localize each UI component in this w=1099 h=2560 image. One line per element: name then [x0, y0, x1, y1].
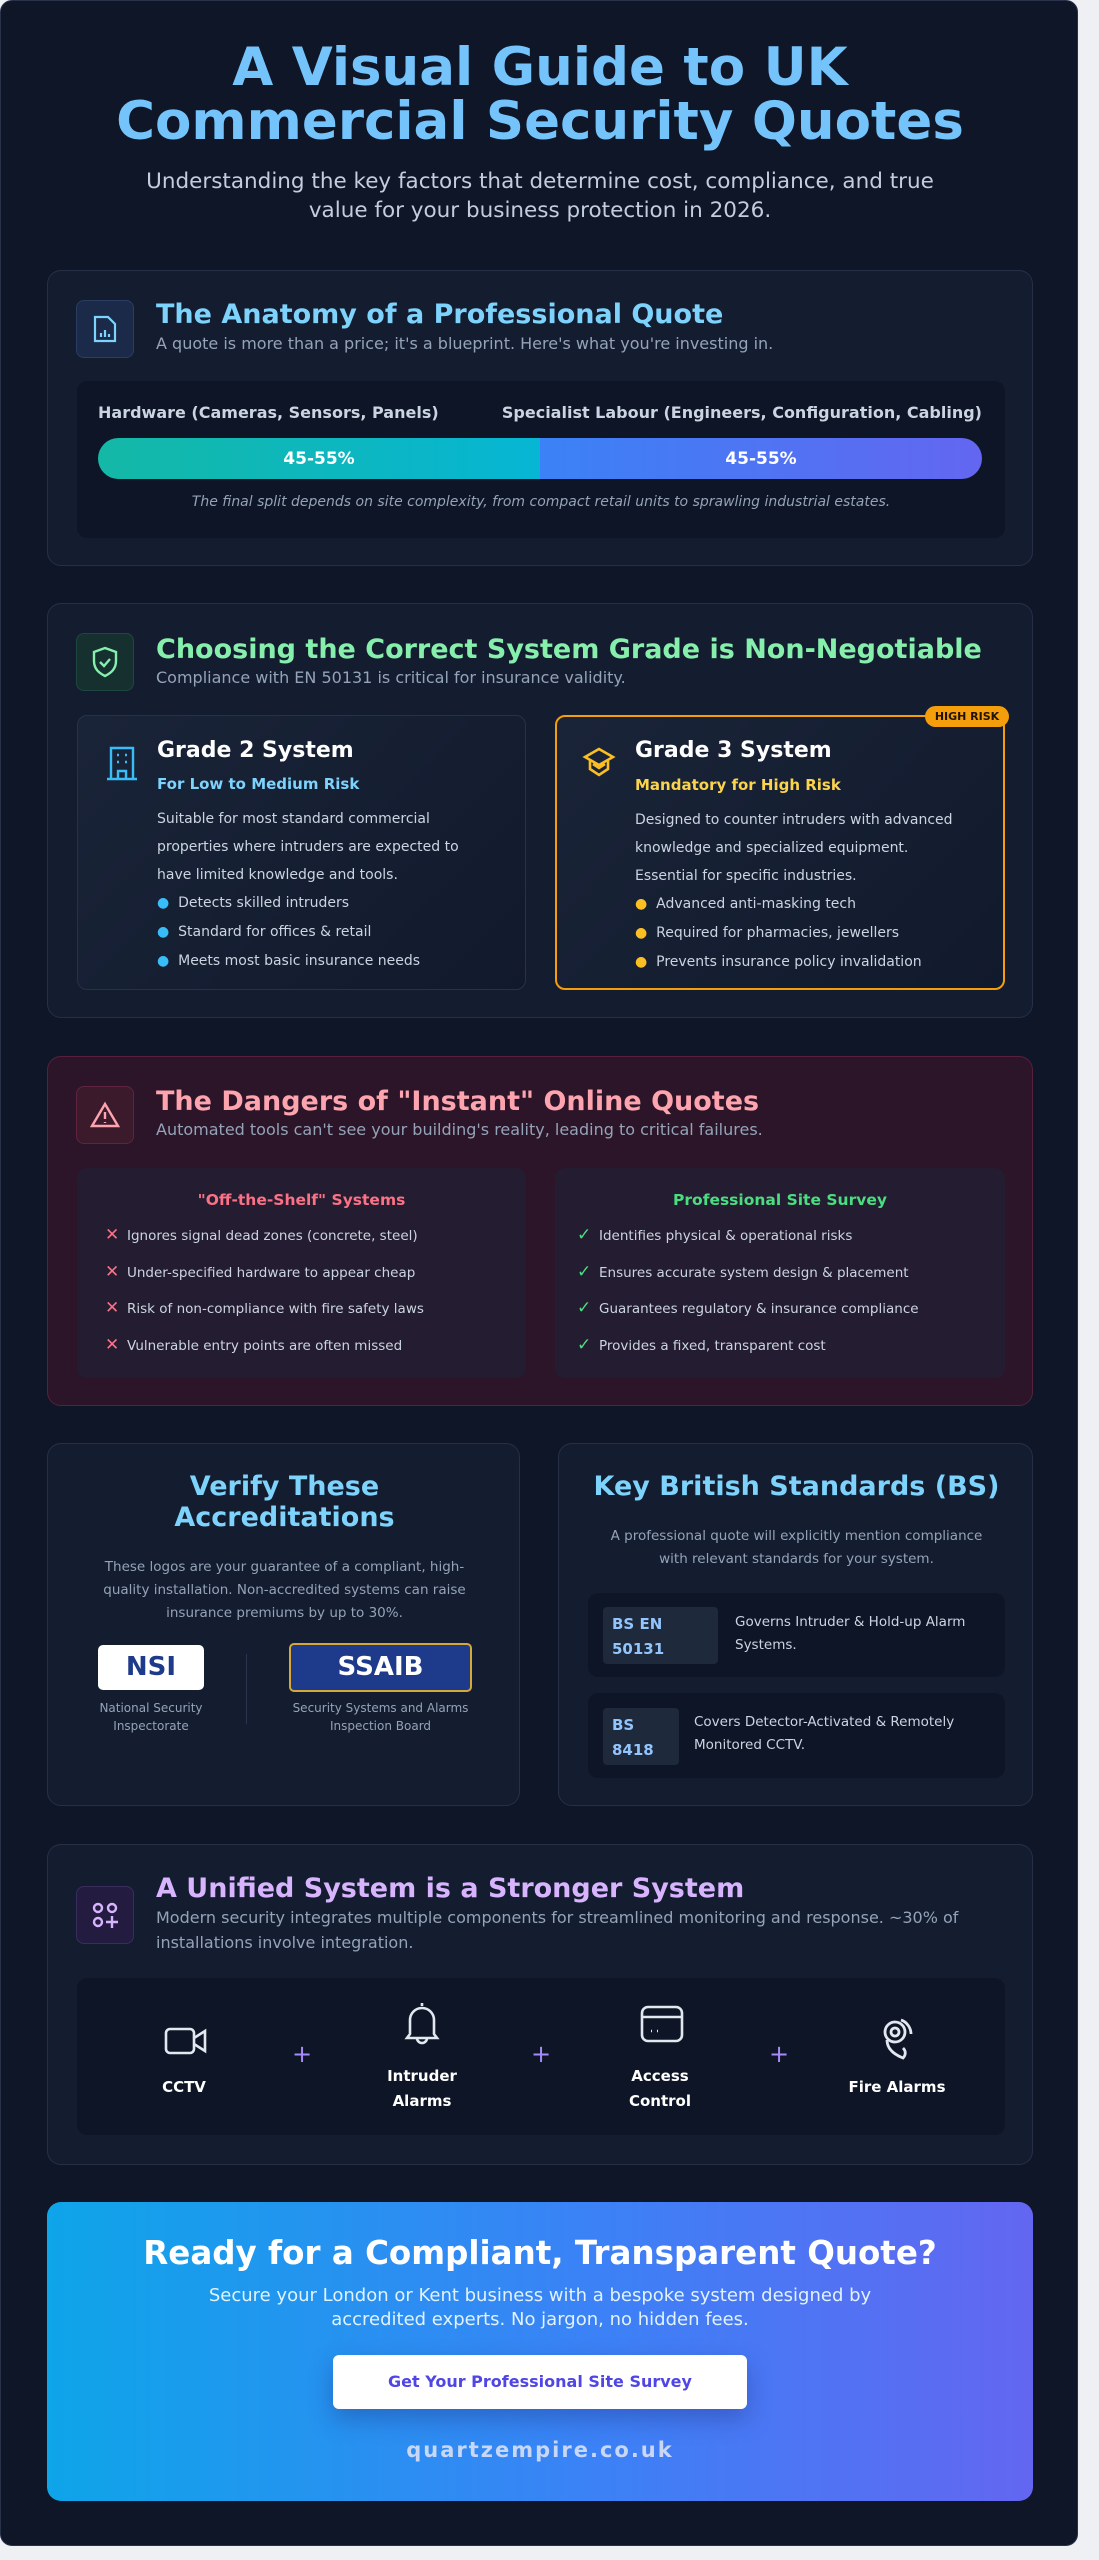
- standard: BS EN 50131: BS EN: [612, 1615, 662, 1633]
- box: professional survey: ✓: [577, 1262, 591, 1282]
- integration diagram: Alarms: [393, 2092, 451, 2110]
- integration diagram: Fire Alarms: [848, 2078, 946, 2096]
- integration diagram: Access: [631, 2067, 689, 2085]
- heading: The Dangers of "Instant" Online Quotes: [156, 1086, 759, 1117]
- cost split bar chart: Hardware (Cameras, Sensors, Panels): [98, 403, 439, 422]
- panel: system grade: Compliance with EN 50131 is critical for insurance validity.: [156, 668, 626, 687]
- icon: fire alarm: [884, 2018, 912, 2060]
- logo: SSAIB: SSAIB: [338, 1652, 423, 1682]
- box: professional survey: ✓: [577, 1225, 591, 1245]
- card: grade 3: Designed to counter intruders with advanced knowledge and specialized equipment. Essential for specific industries.: [635, 812, 953, 884]
- standard: BS EN 50131: [588, 1593, 1005, 1677]
- standard: BS 8418: BS: [612, 1716, 634, 1734]
- card: grade 3: Grade 3 System: [635, 738, 832, 763]
- box: off-the-shelf: Under-specified hardware to appear cheap: [127, 1264, 415, 1280]
- website url: quartzempire.co.uk: [406, 2438, 674, 2462]
- title: Commercial Security Quotes: [116, 91, 964, 152]
- card: grade 2: ● Meets most basic insurance needs: [157, 953, 420, 969]
- title: A Visual Guide to UK: [232, 37, 848, 98]
- box: off-the-shelf: Vulnerable entry points are often missed: [127, 1338, 402, 1354]
- box: off-the-shelf: ✕: [105, 1225, 119, 1245]
- card: grade 3: ● Advanced anti-masking tech: [635, 896, 856, 912]
- standard: BS 8418: 8418: [612, 1741, 654, 1759]
- badge: high risk: [925, 706, 1009, 727]
- panel: accreditations: National Security: [99, 1701, 203, 1715]
- box: off-the-shelf: "Off-the-Shelf" Systems: [198, 1191, 405, 1209]
- heading: The Anatomy of a Professional Quote: [156, 299, 723, 330]
- cost split bar chart: The final split depends on site complexity, from compact retail units to sprawling industrial estates.: [192, 494, 890, 510]
- CTA heading: Ready for a Compliant, Transparent Quote?: [143, 2234, 937, 2272]
- integration diagram: +: [531, 2040, 551, 2068]
- standard: BS 8418: Covers Detector-Activated & Remotely Monitored CCTV.: [694, 1714, 954, 1753]
- card: grade 3: [555, 715, 1005, 990]
- icon: shield: [76, 633, 134, 691]
- heading: A Unified System is a Stronger System: [156, 1873, 744, 1904]
- box: professional survey: Professional Site Survey: [673, 1191, 887, 1209]
- panel: call to action: [47, 2202, 1033, 2501]
- card: grade 2: For Low to Medium Risk: [157, 775, 359, 793]
- logo: NSI: [98, 1645, 204, 1690]
- cost split bar chart: Specialist Labour (Engineers, Configuration, Cabling): [502, 403, 982, 422]
- icon: bell: [404, 2003, 440, 2044]
- panel: call to action: accredited experts. No jargon, no hidden fees.: [331, 2309, 749, 2330]
- icon: access card: [640, 2006, 684, 2042]
- icon: graduation cap: [582, 748, 616, 776]
- panel: british standards: A professional quote will explicitly mention compliance with relevant standards for your system.: [611, 1528, 982, 1567]
- integration diagram: [77, 1978, 1005, 2135]
- button: Get Your Professional Site Survey: [388, 2372, 692, 2391]
- box: professional survey: ✓: [577, 1298, 591, 1318]
- card: grade 2: Grade 2 System: [157, 738, 354, 763]
- icon: document chart: [76, 300, 134, 358]
- panel: system grade: [47, 603, 1033, 1018]
- subtitle: [146, 169, 934, 223]
- standard: BS EN 50131: 50131: [612, 1640, 664, 1658]
- box: off-the-shelf: Ignores signal dead zones (concrete, steel): [127, 1228, 418, 1244]
- integration diagram: +: [292, 2040, 312, 2068]
- box: professional survey: Ensures accurate system design & placement: [599, 1264, 909, 1280]
- cost split bar chart: [77, 381, 1005, 538]
- cost split bar chart: 45-55%: [283, 448, 355, 468]
- panel: dangers of instant quotes: Automated tools can't see your building's reality, leading to critical failures.: [156, 1120, 763, 1139]
- box: off-the-shelf: [77, 1168, 526, 1378]
- panel: accreditations: Security Systems and Alarms: [293, 1701, 468, 1715]
- card: grade 2: ● Standard for offices & retail: [157, 924, 371, 940]
- panel: accreditations: Inspection Board: [330, 1719, 431, 1733]
- subtitle: Understanding the key factors that determine cost, compliance, and true: [146, 169, 934, 194]
- standard: BS 8418: [588, 1693, 1005, 1778]
- card: grade 3: ● Required for pharmacies, jewellers: [635, 925, 899, 941]
- card: grade 3: ● Prevents insurance policy invalidation: [635, 954, 922, 970]
- panel: unified system: Modern security integrates multiple components for streamlined monitoring and response. ~30% of installations involve integration.: [156, 1908, 958, 1952]
- card: grade 2: Suitable for most standard commercial properties where intruders are expected to have limited knowledge and tools.: [157, 811, 459, 883]
- cost split bar chart: 45-55%: [725, 448, 797, 468]
- logo: SSAIB: [289, 1643, 472, 1692]
- box: off-the-shelf: ✕: [105, 1298, 119, 1318]
- badge: high risk: HIGH RISK: [935, 710, 999, 723]
- button: [333, 2355, 747, 2409]
- panel: dangers of instant quotes: [47, 1056, 1033, 1406]
- integration diagram: CCTV: [162, 2078, 206, 2096]
- heading: [174, 1471, 395, 1533]
- subtitle: value for your business protection in 2026.: [309, 198, 771, 223]
- box: off-the-shelf: ✕: [105, 1334, 119, 1354]
- panel: anatomy of a quote: [47, 270, 1033, 566]
- card: grade 2: ● Detects skilled intruders: [157, 895, 349, 911]
- panel: british standards: [558, 1443, 1033, 1806]
- box: professional survey: ✓: [577, 1334, 591, 1354]
- panel: accreditations: These logos are your guarantee of a compliant, high-quality installation. Non-accredited systems can raise insurance premiums by up to 30%.: [103, 1559, 466, 1621]
- icon: CCTV: [164, 2028, 206, 2054]
- panel: anatomy of a quote: A quote is more than a price; it's a blueprint. Here's what you're investing in.: [156, 334, 773, 353]
- card: grade 3: Mandatory for High Risk: [635, 776, 841, 794]
- heading: Choosing the Correct System Grade is Non-Negotiable: [156, 634, 982, 665]
- box: professional survey: Guarantees regulatory & insurance compliance: [599, 1301, 919, 1317]
- standard: BS EN 50131: Governs Intruder & Hold-up Alarm Systems.: [735, 1614, 965, 1653]
- icon: building: [107, 746, 137, 780]
- panel: call to action: Secure your London or Kent business with a bespoke system designed by: [209, 2285, 871, 2306]
- title: [116, 37, 964, 152]
- integration diagram: +: [769, 2040, 789, 2068]
- heading: Accreditations: [174, 1502, 395, 1533]
- box: off-the-shelf: ✕: [105, 1262, 119, 1282]
- box: professional survey: Identifies physical & operational risks: [599, 1228, 852, 1244]
- box: professional survey: [555, 1168, 1005, 1378]
- box: off-the-shelf: Risk of non-compliance with fire safety laws: [127, 1301, 424, 1317]
- icon: grid plus: [76, 1886, 134, 1944]
- panel: accreditations: [47, 1443, 520, 1806]
- integration diagram: Intruder: [387, 2067, 457, 2085]
- heading: Key British Standards (BS): [594, 1471, 999, 1502]
- box: professional survey: Provides a fixed, transparent cost: [599, 1338, 826, 1354]
- logo: NSI: NSI: [126, 1652, 176, 1682]
- heading: Verify These: [190, 1471, 379, 1502]
- panel: unified system: [47, 1844, 1033, 2165]
- integration diagram: Control: [629, 2092, 691, 2110]
- card: grade 2: [77, 715, 526, 990]
- icon: warning: [76, 1086, 134, 1144]
- panel: accreditations: Inspectorate: [113, 1719, 189, 1733]
